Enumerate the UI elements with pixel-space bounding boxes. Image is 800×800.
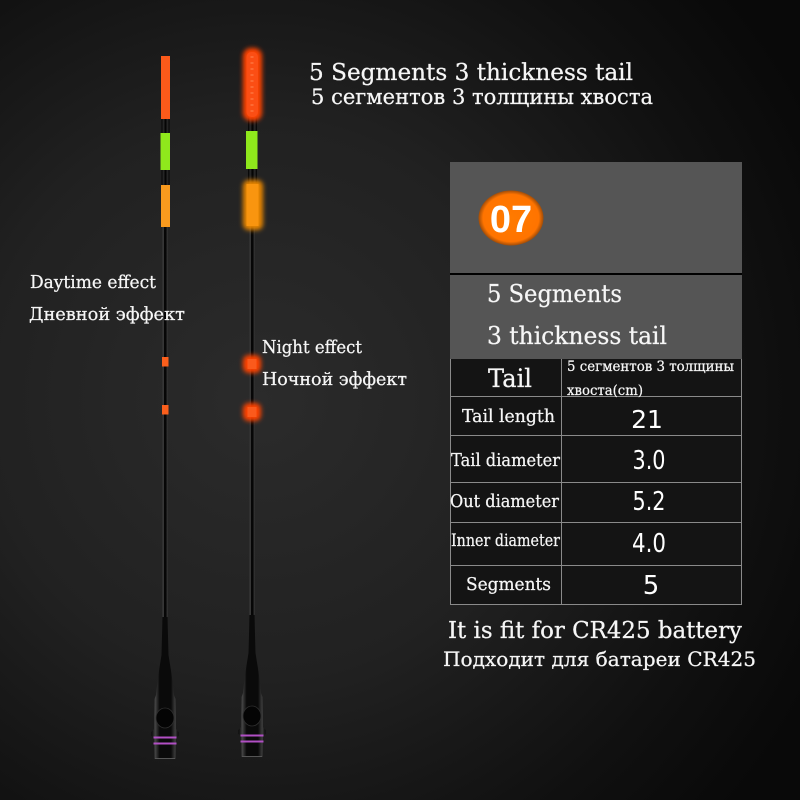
- base connector left: [152, 617, 178, 759]
- night float: [238, 48, 266, 757]
- row: segments: [466, 571, 659, 601]
- subheading text: [487, 280, 667, 350]
- row: inner diameter: Inner diameter: [451, 531, 561, 551]
- base connector right: [238, 615, 266, 757]
- panel subheader: [450, 275, 742, 359]
- specification table: [450, 359, 742, 604]
- row: tail header: [488, 359, 734, 399]
- spec panel: [450, 162, 742, 604]
- row: tail header: Tail: [488, 364, 532, 393]
- daytime float: [152, 56, 178, 759]
- row: inner diameter: [451, 529, 666, 559]
- row: out diameter: Out diameter: [450, 491, 559, 512]
- row: tail header: хвоста(cm): [567, 383, 643, 399]
- row: inner diameter: 4.0: [632, 529, 666, 559]
- battery note russian: Подходит для батареи CR425: [443, 647, 756, 671]
- battery note english: It is fit for CR425 battery: [448, 618, 742, 644]
- number badge 07: [478, 190, 544, 246]
- amber segment: [161, 185, 170, 227]
- subheading text: 3 thickness tail: [487, 322, 667, 350]
- row: tail diameter: Tail diameter: [451, 450, 560, 471]
- green segment: [246, 131, 258, 169]
- row: tail header: 5 сегментов 3 толщины: [567, 359, 734, 375]
- glowing marker lower: [243, 403, 261, 421]
- daytime label: [29, 272, 185, 325]
- green segment: [160, 133, 170, 170]
- marker upper: [162, 357, 168, 366]
- orange top segment: [161, 56, 170, 119]
- glowing marker upper: [243, 355, 261, 373]
- row: tail length: 21: [631, 405, 663, 434]
- row: segments: 5: [643, 571, 659, 601]
- subheading text: 5 Segments: [487, 280, 622, 308]
- night label: Ночной эффект: [262, 369, 407, 390]
- row: tail diameter: [451, 446, 666, 476]
- row: tail diameter: 3.0: [632, 446, 666, 476]
- night label: Night effect: [262, 337, 363, 358]
- glowing orange top segment: [243, 48, 262, 121]
- row: out diameter: [450, 487, 666, 517]
- title english: 5 Segments 3 thickness tail: [309, 60, 633, 86]
- title russian: 5 сегментов 3 толщины хвоста: [311, 85, 653, 109]
- night label: [262, 337, 407, 390]
- glowing amber segment: [243, 180, 263, 230]
- daytime label: Дневной эффект: [29, 304, 185, 325]
- panel header: [450, 162, 742, 273]
- row: out diameter: 5.2: [632, 487, 666, 517]
- row: tail length: Tail length: [462, 406, 555, 427]
- number badge 07: 07: [490, 199, 532, 241]
- row: segments: Segments: [466, 574, 551, 595]
- row: tail length: [462, 405, 663, 434]
- marker lower: [162, 405, 168, 414]
- daytime label: Daytime effect: [30, 272, 157, 293]
